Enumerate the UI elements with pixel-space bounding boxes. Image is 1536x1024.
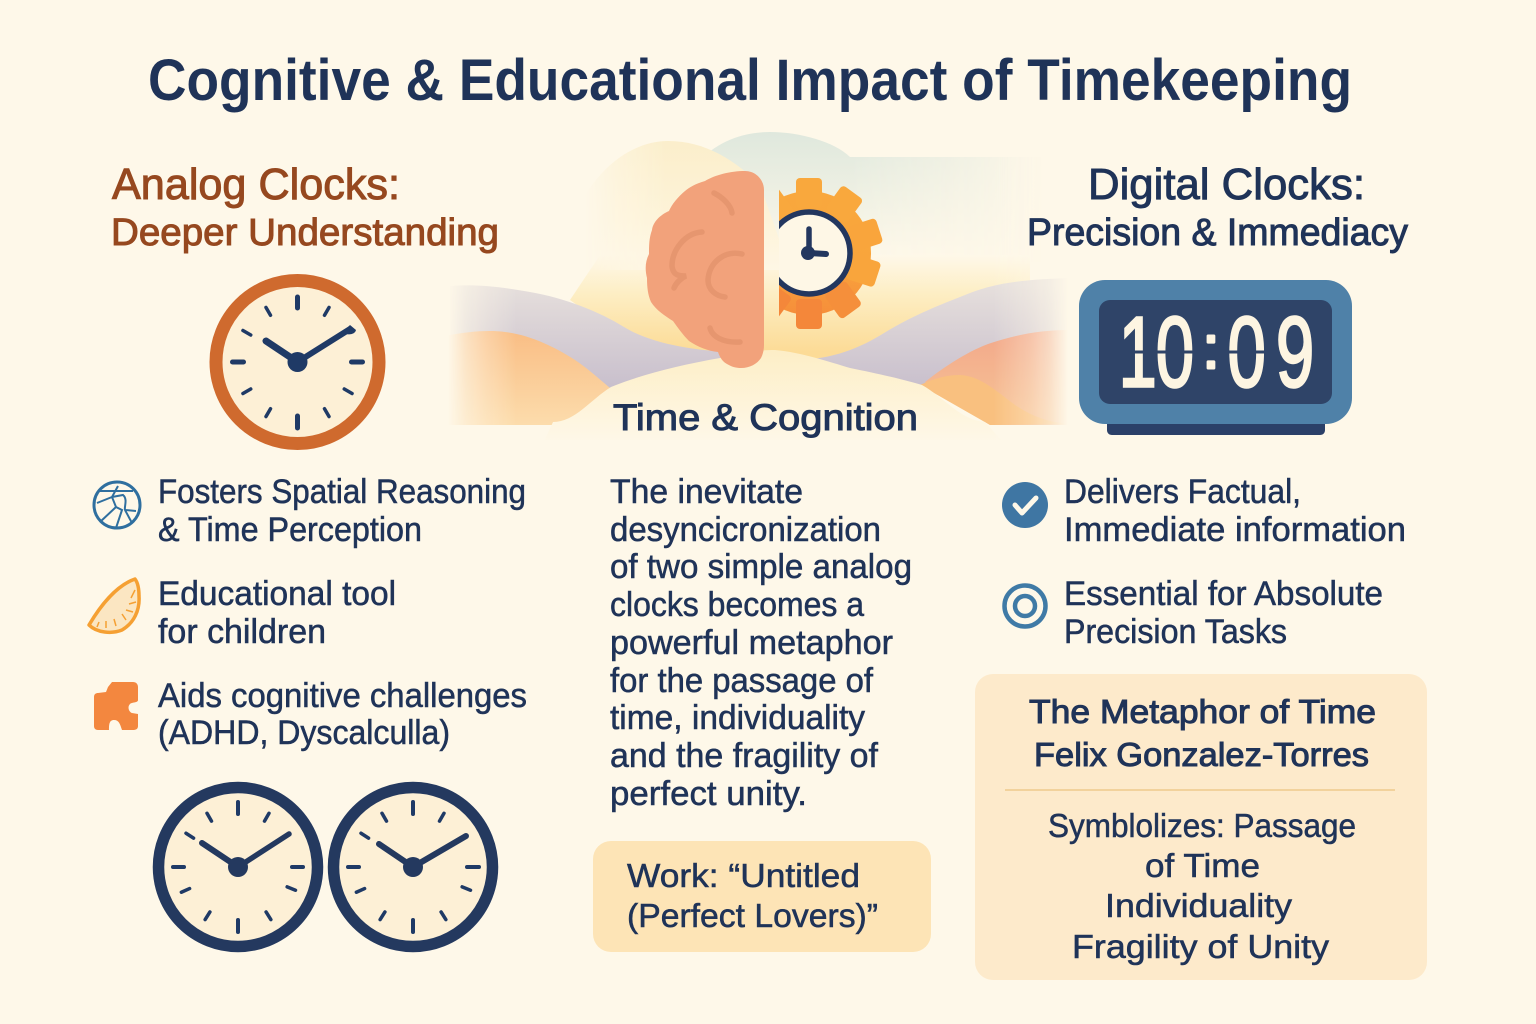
text block: central paragraph: desyncicronization — [610, 511, 881, 549]
bullet: educational tool: for children — [158, 613, 326, 651]
icon: digital clock: 1 — [1119, 297, 1157, 409]
title: Cognitive & Educational Impact of Timekeeping — [148, 48, 1352, 113]
heading: digital clocks: Digital Clocks: — [1088, 160, 1365, 209]
icon: digital clock: : — [1203, 314, 1219, 381]
central landscape illustration — [445, 132, 1070, 450]
icon: puzzle piece — [94, 682, 138, 730]
text block: central paragraph: clocks becomes a — [610, 586, 864, 624]
callout: work title: (Perfect Lovers)” — [627, 897, 878, 934]
panel: metaphor of time: Symblolizes: Passage — [1048, 807, 1356, 844]
text block: central paragraph: for the passage of — [610, 662, 874, 700]
panel: metaphor of time — [975, 674, 1427, 980]
bullet: cognitive challenges: Aids cognitive challenges — [158, 677, 527, 715]
icon: digital clock: 9 — [1276, 297, 1314, 409]
heading: analog clocks: Deeper Understanding — [111, 212, 499, 254]
panel: metaphor of time: Fragility of Unity — [1072, 928, 1330, 965]
bullet: educational tool — [89, 575, 396, 651]
heading: digital clocks — [1027, 160, 1408, 254]
heading: digital clocks: Precision & Immediacy — [1027, 212, 1408, 254]
heading: analog clocks: Analog Clocks: — [112, 160, 400, 209]
icon: brain — [646, 171, 764, 368]
callout: work title — [593, 841, 931, 952]
bullet: absolute precision: Precision Tasks — [1064, 613, 1287, 651]
panel: metaphor of time: of Time — [1145, 847, 1260, 884]
heading: analog clocks — [111, 160, 499, 254]
bullet: absolute precision: Essential for Absolute — [1064, 575, 1383, 613]
bullet: factual information — [1002, 473, 1406, 549]
panel: metaphor of time: The Metaphor of Time — [1029, 693, 1376, 730]
heading: time and cognition: Time & Cognition — [613, 397, 918, 438]
icon: digital clock: 0 — [1228, 297, 1266, 409]
text block: central paragraph: powerful metaphor — [610, 624, 893, 662]
bullet: factual information: Immediate information — [1064, 511, 1406, 549]
text block: central paragraph: perfect unity. — [610, 775, 807, 813]
bullet: spatial reasoning: & Time Perception — [158, 511, 422, 549]
bullet: educational tool: Educational tool — [158, 575, 396, 613]
text block: central paragraph: time, individuality — [610, 699, 865, 737]
icon: perfect lovers right clock — [334, 788, 492, 946]
icon: gear with clock — [779, 178, 882, 329]
icon: digital clock — [1079, 280, 1352, 435]
bullet: spatial reasoning — [94, 473, 526, 549]
text block: central paragraph — [610, 473, 912, 813]
text block: central paragraph: and the fragility of — [610, 737, 879, 775]
icon: analog clock orange — [216, 280, 379, 444]
icon: check mark — [1002, 482, 1048, 528]
icon: orange slice — [89, 579, 139, 632]
bullet: cognitive challenges — [94, 677, 527, 752]
panel: metaphor of time: Individuality — [1105, 887, 1293, 924]
text block: central paragraph: The inevitate — [610, 473, 803, 511]
icon: perfect lovers left clock — [158, 788, 318, 946]
bullet: factual information: Delivers Factual, — [1064, 473, 1301, 511]
text block: central paragraph: of two simple analog — [610, 548, 912, 586]
bullet: cognitive challenges: (ADHD, Dyscalculla) — [158, 714, 450, 752]
icon: digital clock: 0 — [1156, 297, 1194, 409]
bullet: spatial reasoning: Fosters Spatial Reasoning — [158, 473, 526, 511]
icon: cracked globe — [94, 482, 140, 528]
icon: target — [1004, 586, 1046, 626]
callout: work title: Work: “Untitled — [627, 857, 860, 894]
panel: metaphor of time: Felix Gonzalez-Torres — [1034, 736, 1369, 773]
bullet: absolute precision — [1004, 575, 1383, 651]
